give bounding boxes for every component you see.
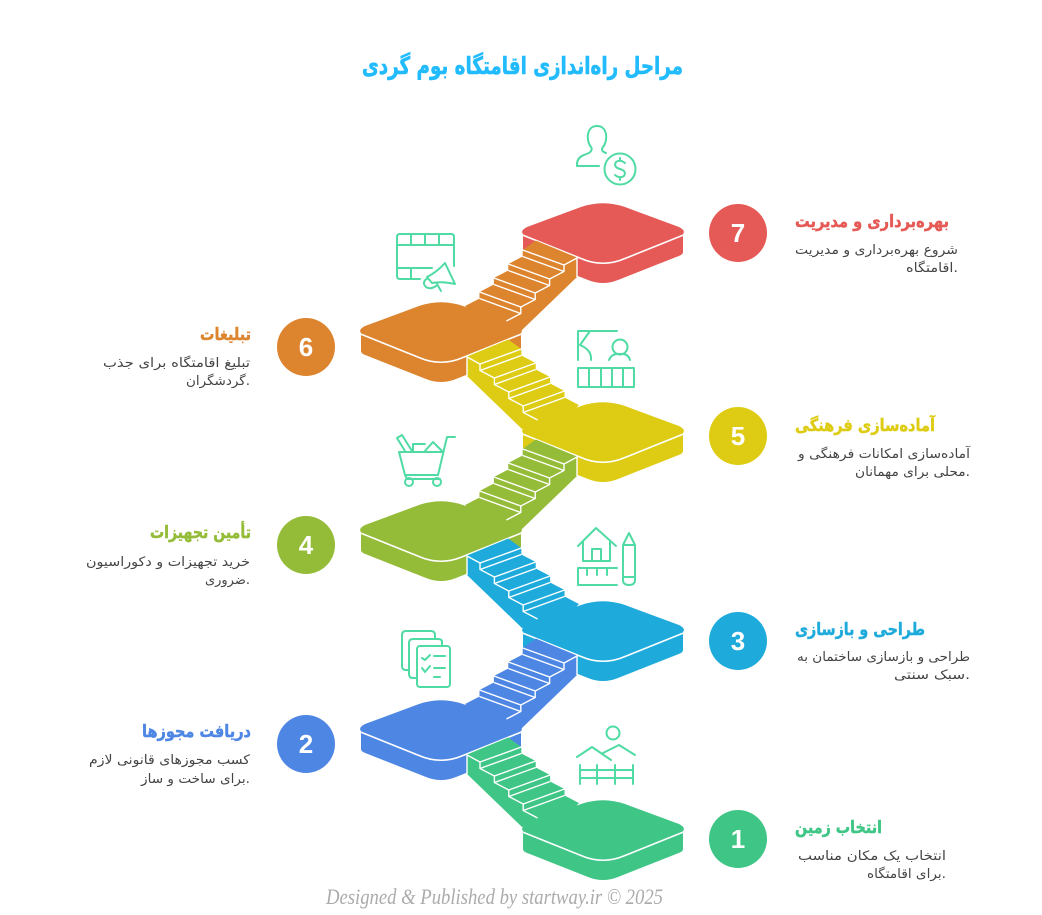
badge 7 (709, 204, 767, 262)
description 4: ضروری. (205, 573, 250, 588)
badge 7: 7 (731, 218, 745, 248)
description 6: تبلیغ اقامتگاه برای جذب (103, 355, 250, 371)
icon: house, ruler and pencil (578, 528, 635, 585)
platform 1 (522, 800, 684, 880)
platform 6 (360, 302, 522, 382)
description 3: سبک سنتی. (894, 668, 970, 683)
description 7: شروع بهره‌برداری و مدیریت (795, 243, 958, 258)
badge 5: 5 (731, 421, 745, 451)
badge 3 (709, 612, 767, 670)
icon: person with dollar (577, 126, 636, 184)
stairs to step 3 (465, 638, 577, 728)
step 3 (709, 612, 970, 683)
description 2: کسب مجوزهای قانونی لازم (89, 753, 251, 768)
stairs to step 5 (465, 440, 577, 529)
description 6: گردشگران. (186, 373, 250, 389)
step 6 (103, 318, 335, 389)
step 1 (709, 810, 946, 882)
badge 1 (709, 810, 767, 868)
platform 3 (522, 601, 684, 681)
icon: shopping cart (397, 435, 455, 486)
footer credit: Designed & Published by startway.ir © 2025 (325, 884, 663, 909)
heading 5: آماده‌سازی فرهنگی (795, 414, 936, 436)
description 7 (795, 243, 958, 276)
badge 5 (709, 407, 767, 465)
stairs to step 7 (465, 240, 577, 330)
staircase diagram (360, 203, 684, 880)
heading 7: بهره‌برداری و مدیریت (795, 212, 949, 232)
badge 3: 3 (731, 626, 745, 656)
description 4 (86, 555, 250, 588)
badge 6: 6 (299, 332, 313, 362)
icon: cultural person and pattern (578, 331, 634, 387)
heading 3: طراحی و بازسازی (795, 620, 925, 640)
icon: permit documents (402, 631, 450, 687)
icon: film and megaphone (397, 234, 455, 291)
title: مراحل راه‌اندازی اقامتگاه بوم گردی (362, 52, 683, 80)
badge 4 (277, 516, 335, 574)
stairs to step 2 (467, 738, 579, 827)
badge 6 (277, 318, 335, 376)
description 6 (103, 355, 250, 389)
description 4: خرید تجهیزات و دکوراسیون (86, 555, 250, 570)
description 1: انتخاب یک مکان مناسب (798, 849, 946, 864)
badge 2 (277, 715, 335, 773)
description 2: برای ساخت و ساز. (140, 772, 250, 787)
badge 4: 4 (299, 530, 314, 560)
icon: land with fence (577, 726, 635, 784)
platform 5 (522, 402, 684, 482)
step 4 (86, 516, 335, 588)
platform 2 (360, 700, 522, 780)
description 7: اقامتگاه. (906, 260, 958, 276)
heading 2: دریافت مجوزها (142, 722, 251, 742)
description 2 (89, 753, 251, 787)
description 5: محلی برای مهمانان. (855, 465, 970, 480)
heading 6: تبلیغات (200, 325, 251, 345)
description 5: آماده‌سازی امکانات فرهنگی و (797, 445, 971, 462)
badge 2: 2 (299, 729, 313, 759)
description 1 (798, 849, 946, 882)
heading 1: انتخاب زمین (795, 818, 882, 838)
heading 4: تأمین تجهیزات (150, 521, 251, 543)
description 1: برای اقامتگاه. (867, 866, 946, 882)
stairs to step 6 (467, 340, 579, 429)
platform 7 (522, 203, 684, 283)
step 5 (709, 407, 971, 480)
description 3 (797, 650, 970, 683)
stairs to step 4 (467, 538, 579, 628)
platform 4 (360, 501, 522, 581)
step 2 (89, 715, 335, 787)
description 3: طراحی و بازسازی ساختمان به (797, 650, 970, 665)
step 7 (709, 204, 958, 276)
badge 1: 1 (731, 824, 745, 854)
description 5 (797, 445, 971, 480)
